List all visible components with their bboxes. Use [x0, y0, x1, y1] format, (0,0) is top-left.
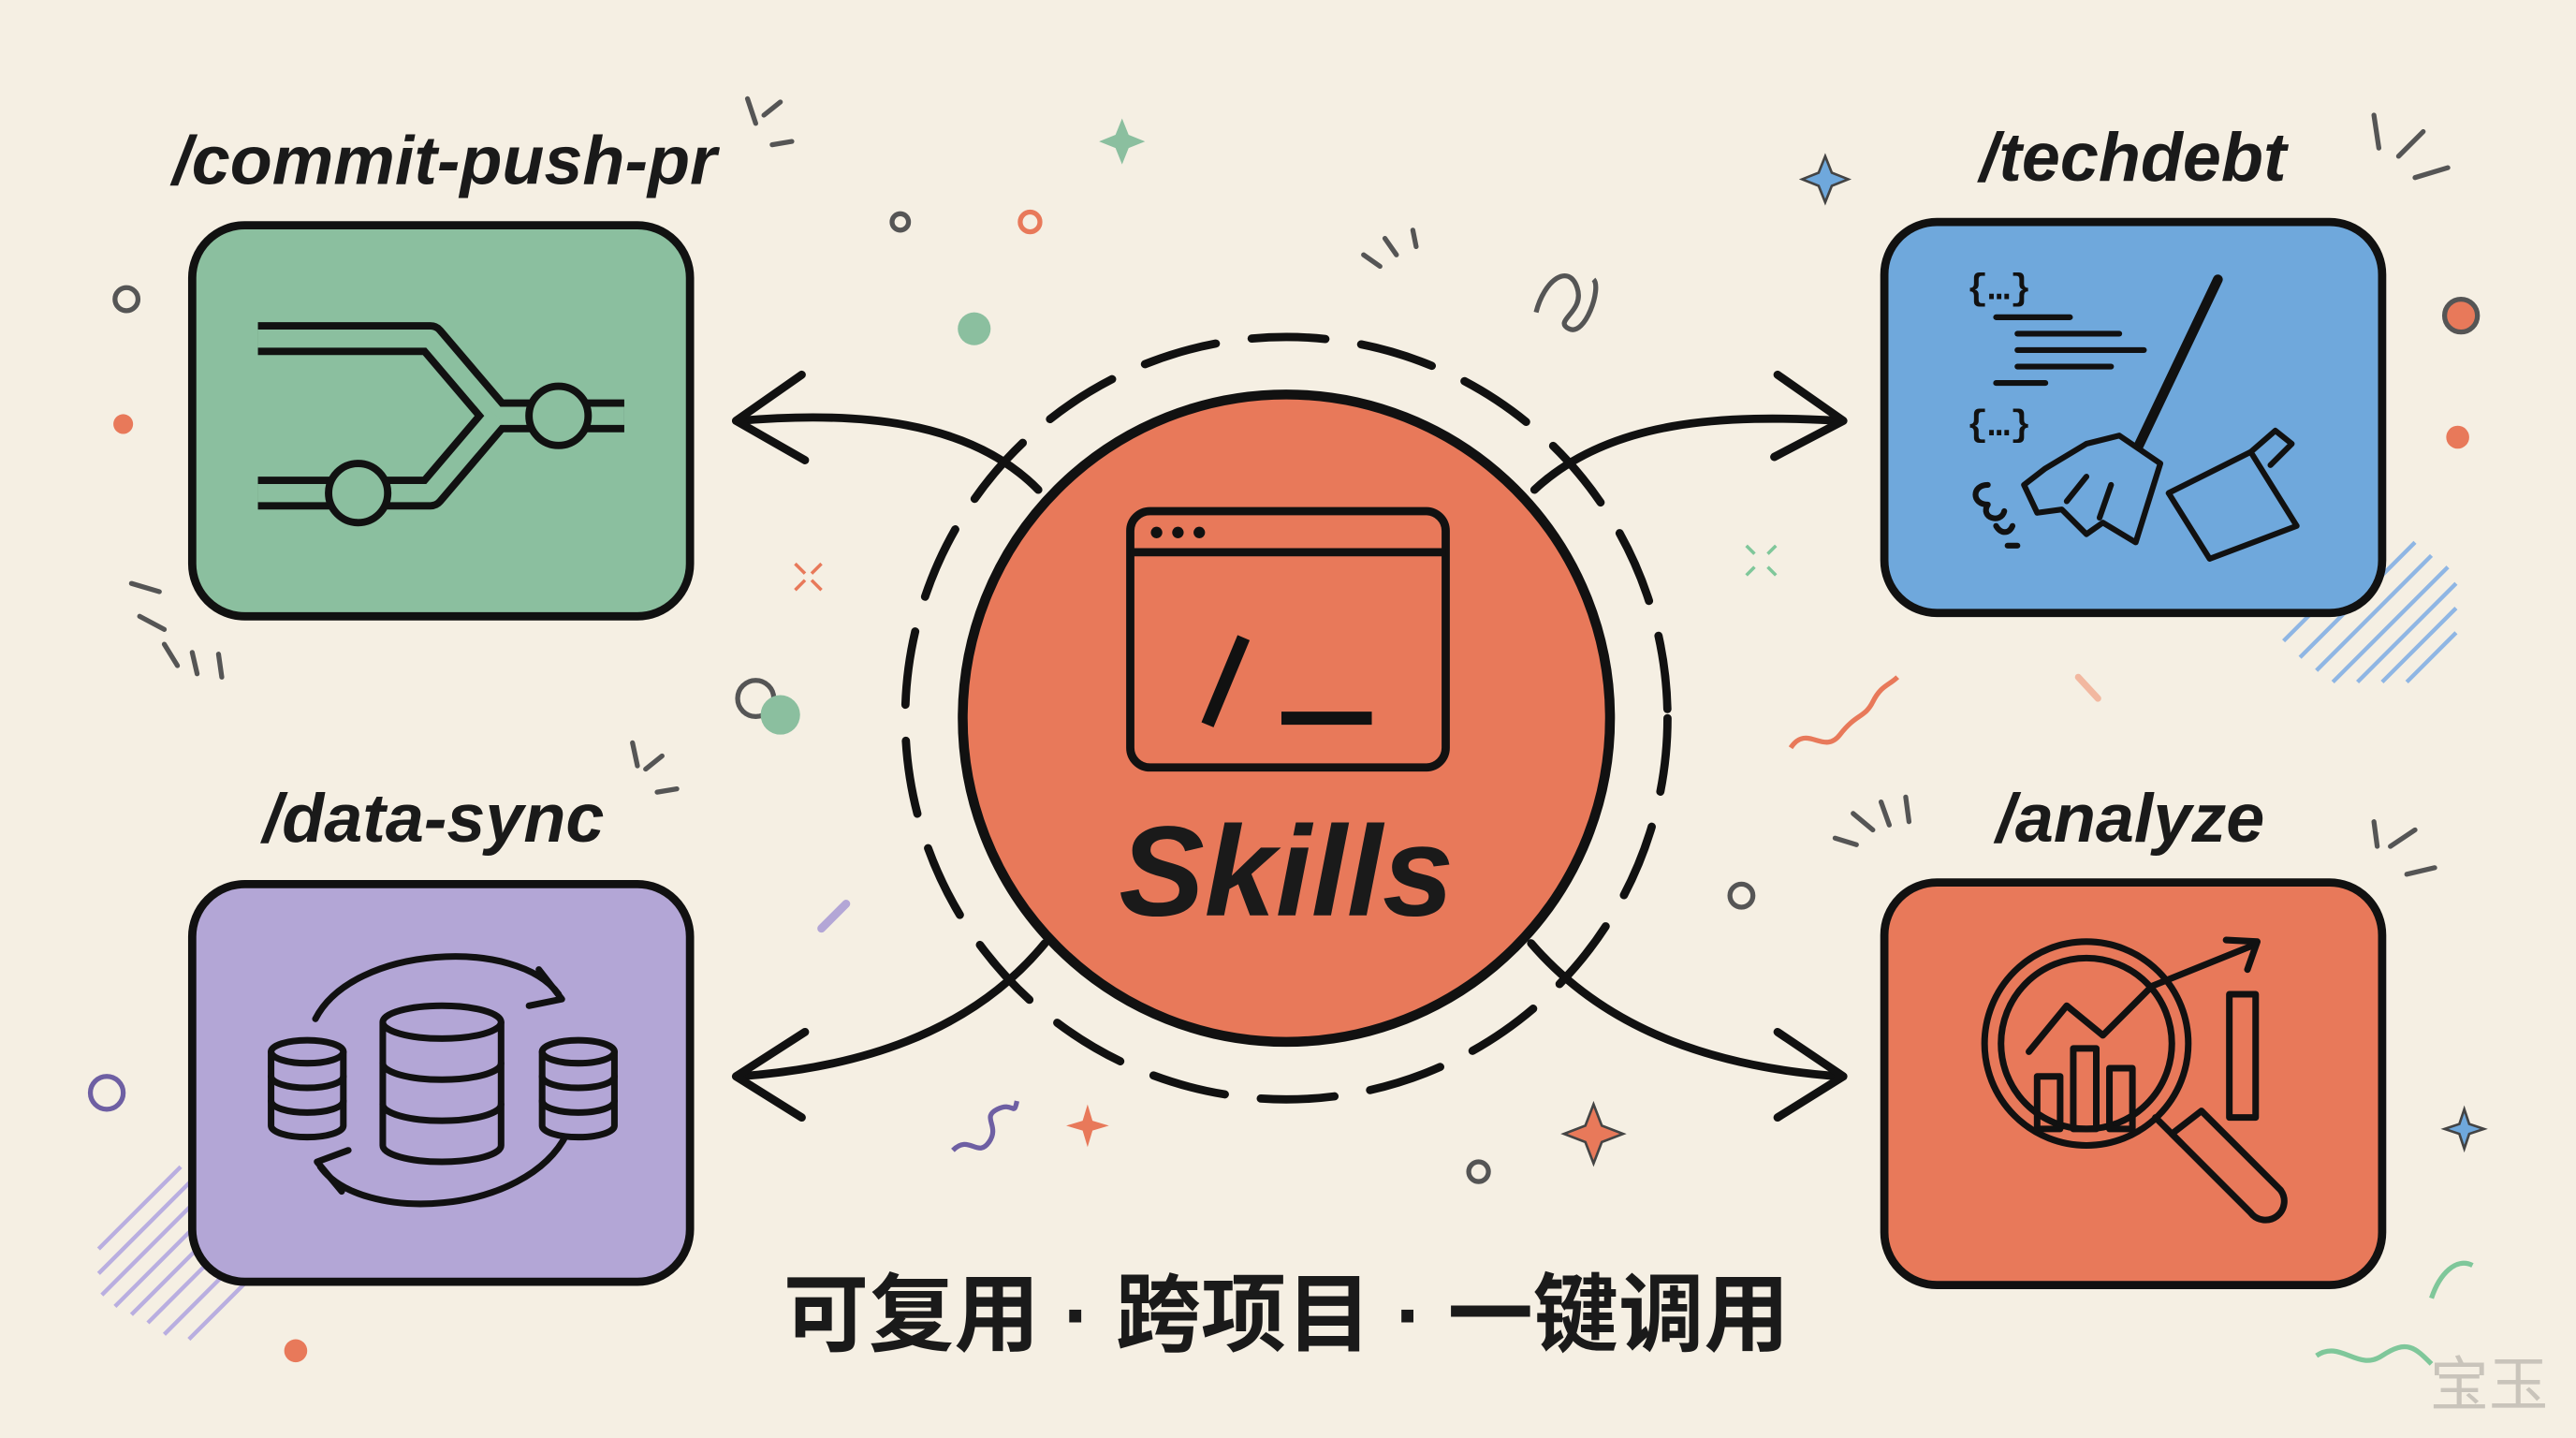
icon: code and broom: {…} — [1967, 270, 2031, 311]
center circle: Skills — [962, 394, 1610, 1042]
panel: commit-push-pr — [192, 226, 690, 616]
label: /data-sync: /data-sync — [260, 779, 604, 857]
decorative hatch purple — [91, 1167, 246, 1347]
label: /commit-push-pr: /commit-push-pr — [169, 122, 721, 199]
icon: code and broom: {…} — [1967, 405, 2031, 447]
panel: analyze — [1884, 883, 2382, 1285]
icon: database sync — [271, 957, 614, 1204]
panel: data-sync — [192, 884, 690, 1282]
icon: magnifier with chart — [1984, 940, 2284, 1220]
text: Skills: Skills — [1119, 800, 1454, 944]
icon: code and broom — [1967, 270, 2297, 559]
dashed ring — [905, 337, 1667, 1099]
label: /techdebt: /techdebt — [1977, 118, 2290, 196]
watermark: 宝玉 — [2430, 1338, 2548, 1423]
arrow: center to data-sync — [736, 944, 1045, 1118]
bottom tagline: 可复用 · 跨项目 · 一键调用 — [783, 1268, 1790, 1363]
panel: techdebt — [1884, 222, 2382, 613]
arrow: center to analyze — [1531, 944, 1843, 1118]
decorative hatch blue — [2284, 542, 2456, 682]
arrow: center to techdebt — [1534, 374, 1843, 490]
decorations — [91, 213, 2478, 1364]
label: /analyze: /analyze — [1993, 779, 2264, 857]
arrow: center to commit-push-pr — [736, 374, 1038, 490]
icon: terminal window — [1131, 511, 1445, 768]
icon: git branch merge — [258, 339, 624, 522]
